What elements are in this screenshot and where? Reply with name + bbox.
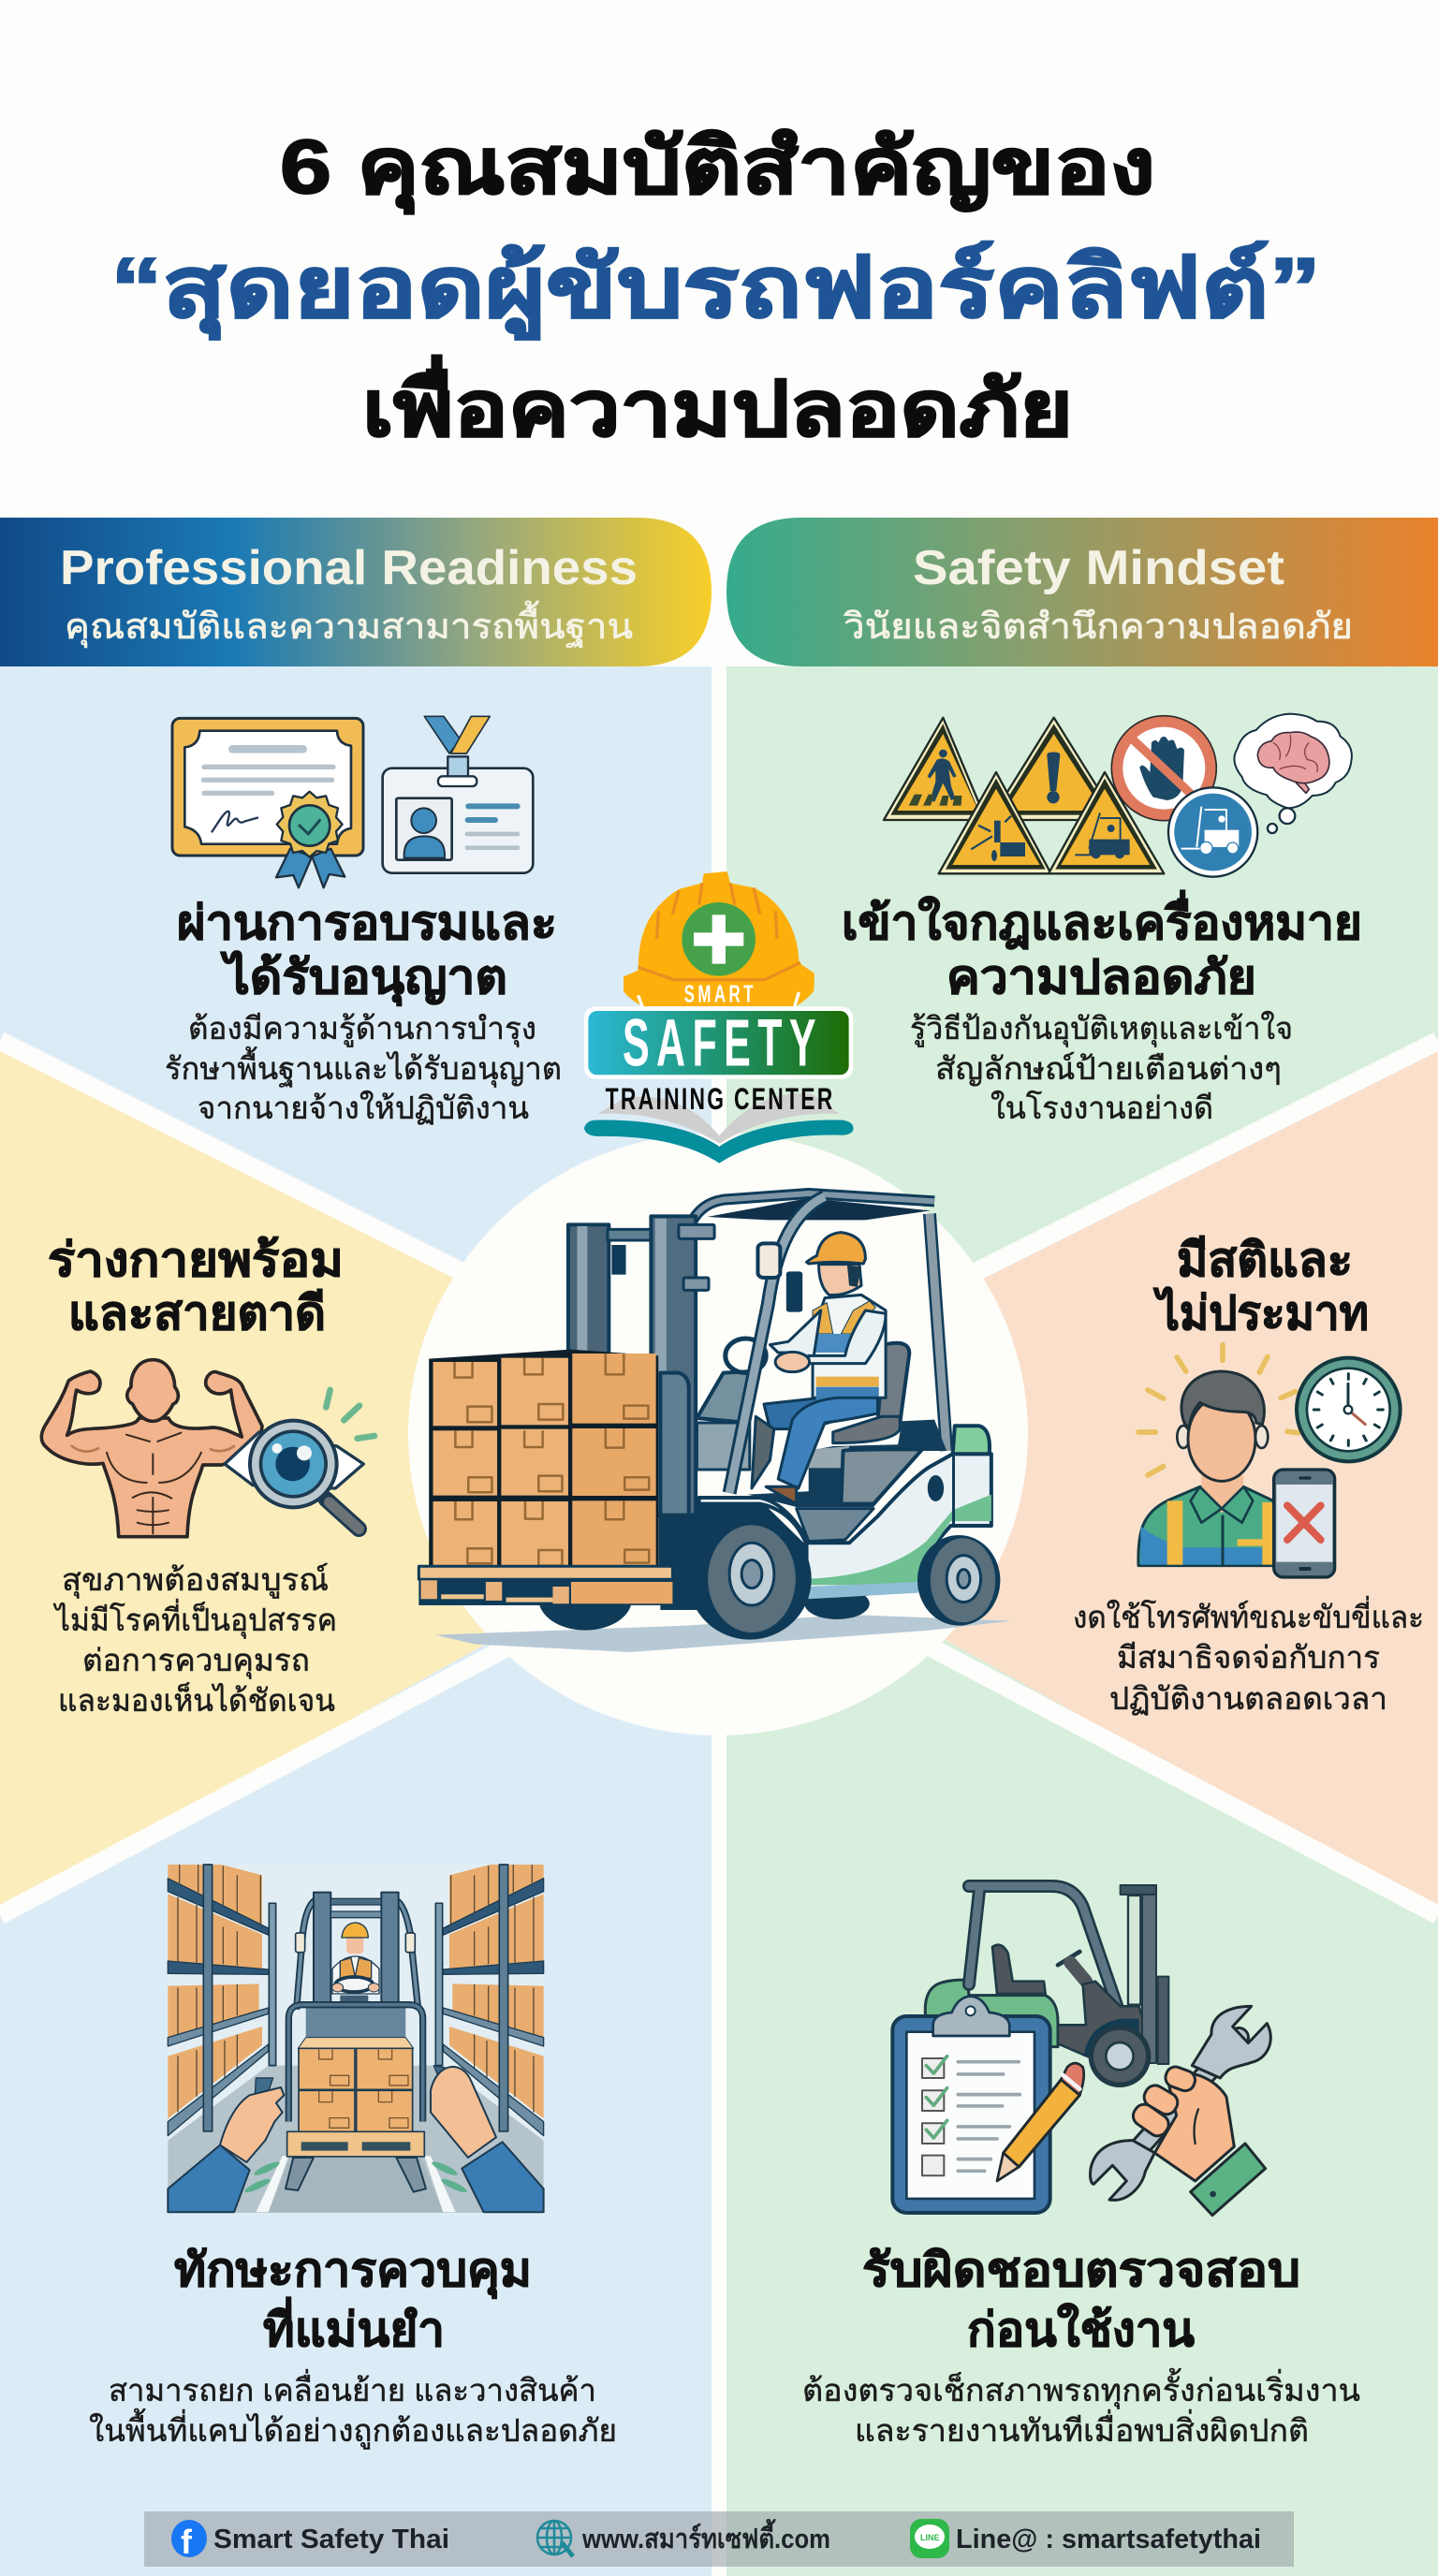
text: body and eyesight description: ต่อการควบคุมรถ <box>82 1643 310 1679</box>
text: mindfulness description: มีสมาธิจดจ่อกับการ <box>1117 1640 1380 1675</box>
title: “สุดยอดผู้ขับรถฟอร์คลิฟต์” <box>110 241 1321 341</box>
footer contact bar <box>144 2511 1294 2567</box>
text: precise control: ทักษะการควบคุม <box>174 2244 532 2299</box>
text: mindfulness description <box>1073 1596 1424 1716</box>
text: mindfulness heading: มีสติและ <box>1177 1234 1353 1286</box>
icon: attentive worker, clock and phone <box>1138 1345 1402 1577</box>
footer contact bar: Smart Safety Thai <box>213 2525 449 2554</box>
text: precise control <box>89 2244 617 2450</box>
text: mindfulness description: ปฏิบัติงานตลอดเวลา <box>1109 1681 1387 1716</box>
icon: globe <box>537 2521 573 2556</box>
header: Professional Readiness: Professional Readiness <box>60 541 638 595</box>
text: training and license: จากนายจ้างให้ปฏิบัติงาน <box>198 1090 529 1125</box>
icon: line <box>910 2519 949 2558</box>
text: precise control: สามารถยก เคลื่อนย้าย และวางสินค้า <box>109 2369 596 2408</box>
text: body and eyesight heading: และสายตาดี <box>68 1287 326 1339</box>
text: mindfulness heading <box>1152 1234 1369 1339</box>
text: rules and signs: รู้วิธีป้องกันอุบัติเหตุและเข้าใจ <box>910 1011 1293 1047</box>
panel backgrounds <box>0 666 1438 2576</box>
icon: warning signs and brain <box>884 714 1352 877</box>
text: rules and signs <box>842 890 1362 1125</box>
icon: checklist, forklift, wrench <box>892 1885 1270 2216</box>
text: precise control: ในพื้นที่แคบได้อย่างถูกต้องและปลอดภัย <box>89 2408 617 2450</box>
text: body and eyesight description: และมองเห็นได้ชัดเจน <box>58 1682 335 1718</box>
text: rules and signs: ความปลอดภัย <box>946 951 1256 1003</box>
icon: warehouse aisle driver view <box>168 1865 544 2213</box>
footer contact bar: www.สมาร์ทเซฟตี้.com <box>581 2518 830 2554</box>
text: training and license <box>165 897 562 1125</box>
left racks <box>168 1865 276 2136</box>
text: responsibility inspection: ต้องตรวจเช็กสภาพรถทุกครั้งก่อนเริ่มงาน <box>802 2368 1360 2409</box>
text: responsibility inspection: และรายงานทันทีเมื่อพบสิ่งผิดปกติ <box>855 2409 1309 2448</box>
text: responsibility inspection: รับผิดชอบตรวจสอบ <box>862 2244 1300 2296</box>
text: precise control: ที่แม่นยำ <box>263 2297 445 2356</box>
logo: Smart Safety Training Center: SMART <box>684 980 754 1008</box>
icon: muscular body and eye <box>41 1360 374 1537</box>
title: เพื่อความปลอดภัย <box>362 355 1073 452</box>
title: 6 คุณสมบัติสำคัญของ <box>280 124 1155 214</box>
logo: Smart Safety Training Center: TRAINING CENTER <box>606 1081 832 1116</box>
text: rules and signs: สัญลักษณ์ป้ายเตือนต่างๆ <box>935 1051 1282 1086</box>
header: Professional Readiness <box>0 518 712 666</box>
text: body and eyesight heading <box>48 1234 344 1339</box>
text: rules and signs: เข้าใจกฎและเครื่องหมาย <box>842 890 1362 949</box>
icon: certificate and ID card <box>172 716 533 887</box>
title <box>110 124 1321 452</box>
text: training and license: ต้องมีความรู้ด้านการบำรุง <box>188 1011 536 1047</box>
central forklift illustration <box>418 1193 1012 1652</box>
icon: facebook: f <box>181 2523 193 2561</box>
header: Safety Mindset: Safety Mindset <box>913 541 1284 595</box>
text: responsibility inspection <box>802 2244 1360 2448</box>
text: training and license: ได้รับอนุญาต <box>220 950 507 1006</box>
header: Safety Mindset <box>726 518 1438 666</box>
text: training and license: ผ่านการอบรมและ <box>177 897 557 949</box>
footer contact bar: Line@ : smartsafetythai <box>956 2525 1261 2554</box>
text: responsibility inspection: ก่อนใช้งาน <box>967 2303 1195 2356</box>
text: body and eyesight description: ไม่มีโรคที่เป็นอุปสรรค <box>52 1599 337 1639</box>
header: Safety Mindset: วินัยและจิตสำนึกความปลอดภัย <box>844 607 1353 647</box>
text: body and eyesight heading: ร่างกายพร้อม <box>48 1234 344 1286</box>
text: mindfulness heading: ไม่ประมาท <box>1152 1286 1369 1339</box>
text: rules and signs: ในโรงงานอย่างดี <box>990 1090 1213 1125</box>
icon: facebook <box>171 2520 207 2561</box>
icon: line: LINE <box>920 2533 940 2542</box>
text: mindfulness description: งดใช้โทรศัพท์ขณะขับขี่และ <box>1073 1596 1424 1634</box>
text: body and eyesight description <box>52 1562 337 1718</box>
right racks <box>435 1865 544 2136</box>
text: training and license: รักษาพื้นฐานและได้รับอนุญาต <box>165 1046 562 1088</box>
header: Professional Readiness: คุณสมบัติและความสามารถพื้นฐาน <box>65 600 633 648</box>
logo: Smart Safety Training Center <box>584 871 854 1164</box>
text: body and eyesight description: สุขภาพต้องสมบูรณ์ <box>62 1562 329 1599</box>
logo: Smart Safety Training Center: SAFETY <box>623 1005 816 1080</box>
